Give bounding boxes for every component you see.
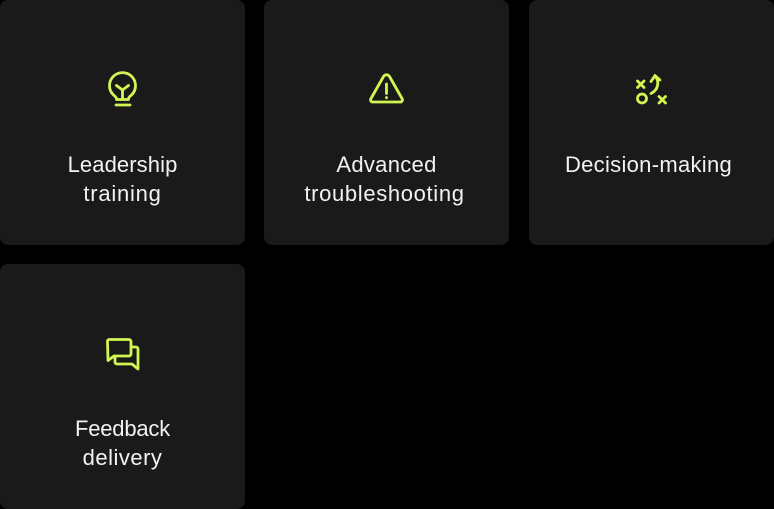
icon: warning triangle (369, 73, 404, 104)
icon: strategy play (636, 74, 667, 104)
icon: chat bubbles (106, 338, 140, 370)
label: troubleshooting: troubleshooting (304, 181, 465, 206)
label: advanced: Advanced (336, 152, 437, 177)
label: delivery: delivery (83, 445, 162, 470)
label: leadership: Leadership (68, 152, 177, 177)
panel: decision-making (529, 0, 774, 245)
label: decision-making: Decision-making (565, 152, 732, 177)
panel: leadership training (0, 0, 245, 245)
icon: light bulb (108, 71, 137, 106)
label: training: training (83, 181, 162, 206)
label: feedback: Feedback (75, 416, 170, 441)
panel: advanced troubleshooting (264, 0, 509, 245)
panel: feedback delivery (0, 264, 245, 509)
